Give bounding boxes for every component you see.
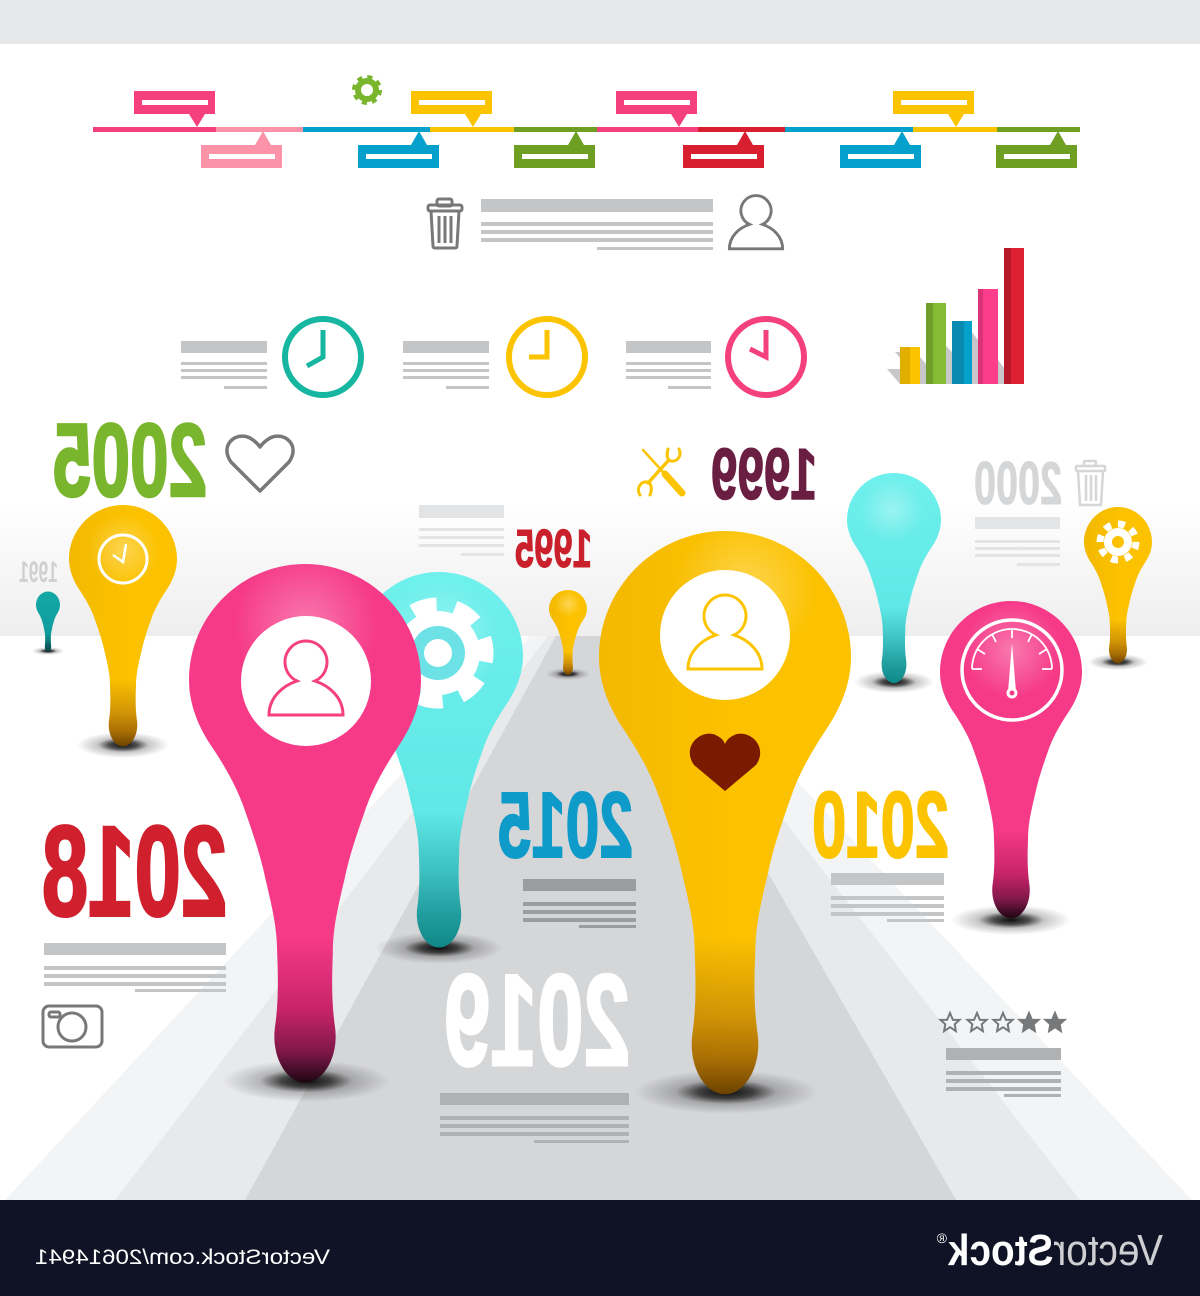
- timeline bar: [93, 127, 1080, 132]
- pin: yellow user: [599, 518, 851, 1114]
- year: 2000: 2000: [974, 450, 1062, 517]
- icon: maroon heart: [690, 734, 760, 791]
- icon: teal clock: [285, 319, 361, 395]
- year: 1999: 1999: [711, 435, 817, 515]
- pin: pink gauge: [940, 601, 1082, 935]
- icon: clock: [99, 535, 147, 583]
- icon: gauge: [962, 620, 1062, 720]
- icon: heart outline: [227, 436, 293, 491]
- text block: rating: [946, 1048, 1061, 1097]
- icon: camera: [43, 1006, 102, 1047]
- tag: light pink bottom: [201, 131, 282, 168]
- tag: blue bottom 2: [840, 131, 921, 168]
- text block: yellow clock: [403, 341, 489, 389]
- icon: yellow clock: [509, 319, 585, 395]
- text block: 2015: [523, 879, 636, 928]
- pin: pink user: [189, 553, 421, 1102]
- tag: pink top 2: [616, 91, 697, 127]
- icon: large gear: [391, 606, 485, 700]
- pin: small teal: [32, 592, 64, 655]
- pin: cyan right: [847, 473, 941, 693]
- icon: faded trash: [1076, 461, 1105, 505]
- text block: 2000: [975, 517, 1060, 566]
- icon: trash: [428, 199, 462, 248]
- pin: cyan gear: [355, 572, 523, 964]
- icon: user: [688, 595, 762, 669]
- icon: gear: [1100, 524, 1136, 560]
- text block: 2018: [44, 943, 226, 992]
- text block: pink clock: [626, 341, 711, 389]
- bar chart: [887, 248, 1024, 384]
- tag: green bottom 1: [514, 131, 595, 168]
- tag: red bottom: [683, 131, 764, 168]
- year: 2019: 2019: [444, 947, 630, 1093]
- text block: top: [481, 199, 713, 250]
- icon: user: [269, 641, 343, 715]
- pin: yellow gear: [1084, 507, 1152, 670]
- pin: yellow clock: [69, 505, 177, 758]
- tag: blue bottom 1: [358, 131, 439, 168]
- tag: pink top 1: [134, 91, 215, 127]
- icon: tools: [638, 449, 682, 495]
- pin: small yellow: [546, 590, 590, 680]
- footer bar: [0, 1200, 1200, 1296]
- text block: 2010: [831, 873, 944, 922]
- footer url: VectorStock.com/20614941: [35, 1246, 330, 1269]
- tag: green bottom 2: [996, 131, 1077, 168]
- text block: teal clock: [181, 341, 267, 389]
- text block: 2019: [440, 1093, 629, 1143]
- tag: yellow top 2: [893, 91, 974, 127]
- icon: star rating: [940, 1013, 1064, 1031]
- year: 1995: 1995: [515, 519, 592, 579]
- tag: yellow top 1: [411, 91, 492, 127]
- year: 2015: 2015: [498, 773, 633, 877]
- registered mark: ®: [936, 1230, 947, 1246]
- icon: user outline: [729, 196, 783, 249]
- icon: pink clock: [728, 319, 804, 395]
- icon: green gear: [354, 78, 380, 102]
- year: 2010: 2010: [812, 772, 949, 877]
- footer logo: VectorStock: [948, 1226, 1163, 1275]
- text block: 1995: [419, 505, 504, 556]
- timeline: [93, 91, 1080, 168]
